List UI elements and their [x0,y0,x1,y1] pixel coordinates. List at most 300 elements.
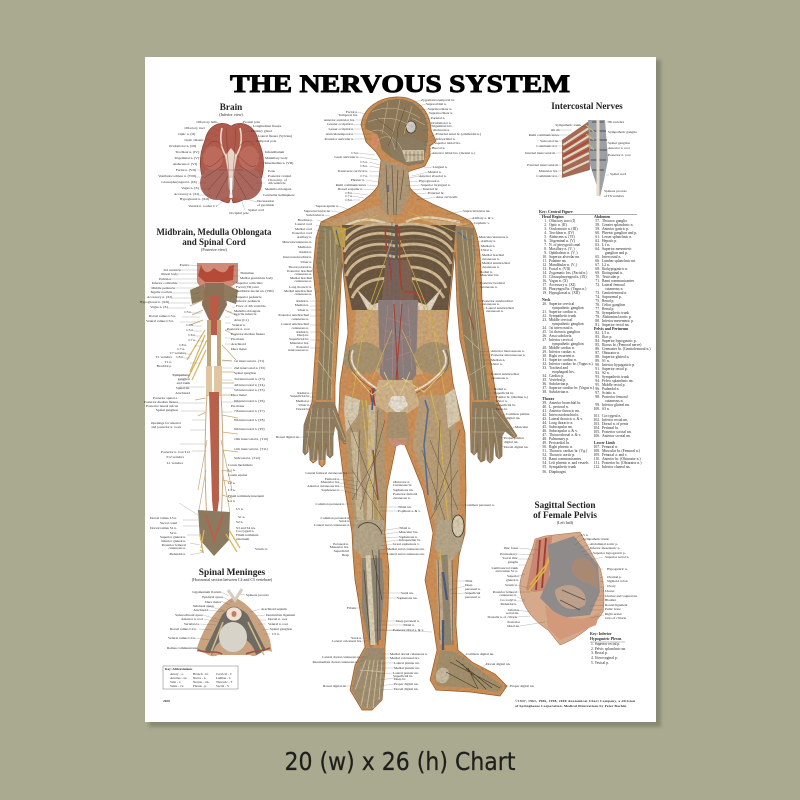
key column: head region, neck, thorax: Oculomotor n. (III) [549,227,578,231]
key column: head region, neck, thorax: 41. [542,409,547,413]
spinal cord labels: Inferior colliculus [152,281,178,285]
spinal cord labels: 9th intercostal n. (T9) [234,427,265,431]
left labels of figure: Suprascapular n. [316,204,339,208]
key column: head region, neck, thorax: 45. [542,425,547,429]
spinal cord labels: Superior peduncle [236,295,262,299]
right labels of figure: Deep [465,583,473,587]
left labels of figure: Posterior antebrachial [278,313,309,317]
key column: abdomen, pelvis, lower limb: 99. [595,403,600,407]
left labels of figure: Lateral antebrachial [281,322,309,326]
right labels of figure: Deep br. [496,407,508,411]
key column: abdomen, pelvis, lower limb: 88. [595,355,600,359]
right labels of figure: Superior labial brs. [434,141,461,145]
key column: abdomen, pelvis, lower limb: 57. [595,219,600,223]
key column: abdomen, pelvis, lower limb: Posterior br. (Obturator n.) [602,461,642,465]
pelvis labels: and ramus S1 n. [495,569,518,573]
right labels of figure: Dorsal digital nn. [504,445,529,449]
key column: head region, neck, thorax: 1st thoracic ganglion [549,330,580,334]
left labels of figure: Sural n. [339,519,350,523]
spinal cord labels: Dorsal ramus L5 n. [150,516,177,520]
spinal cord labels: Spinal ganglion [156,408,178,412]
key column: abdomen, pelvis, lower limb: Iliac p. [602,335,612,339]
key column: abdomen, pelvis, lower limb: 86. [595,347,600,351]
brain labels: Posterior cranial [268,174,291,178]
spinal cord labels: Posterior femoral [162,543,186,547]
brain labels: Optic n. (II) [178,132,196,136]
abdomen [352,310,446,375]
key column: head region, neck, thorax: Palatine nn. [549,259,566,263]
right labels of figure: Muscular brs. [480,273,499,277]
spinal cord labels: 6th intercostal n. (T6) [234,399,265,403]
illustration: spinal meninges [197,589,272,656]
right labels of figure: Saphenous n. [399,535,418,539]
right labels of figure: cutaneous n. [482,257,500,261]
right labels of figure: Medial antebrachial [482,261,510,265]
brain labels: Lateral fissure (Sylvian) [258,134,293,138]
key column: abdomen, pelvis, lower limb: Superior rectal p. [602,367,628,371]
intercostal labels [525,120,637,198]
brain labels: Optic chiasm [184,138,203,142]
neck [378,160,410,215]
right labels of figure: Mental n. [428,170,442,174]
key column: head region, neck, thorax: Anterior bronchial br. [549,401,581,405]
left labels of figure: Peroneal n. [333,542,349,546]
right labels of figure: Common digital nn. [466,652,494,656]
illustration: brain inferior view [200,123,264,203]
spinal cord labels: externum [236,537,249,541]
spinal cord labels: ganglion [178,377,190,381]
key: inferior hypogastric plexus: 4. Uterovaginal p. [591,656,618,660]
pelvis labels: Ovarian p. [607,575,622,579]
right labels of figure: Cutaneous br. [393,483,412,487]
right labels of figure: Proper digital nn. [510,684,535,688]
key column: abdomen, pelvis, lower limb: Inferior mesenteric p. [602,319,634,323]
spinal cord labels: Ventral ramus C3 n. [146,319,174,323]
key column: head region, neck, thorax: Superior cardiac br. (Vagus n.) [549,386,595,390]
key column: head region, neck, thorax [542,215,595,474]
key column: abdomen, pelvis, lower limb: 66. [595,259,600,263]
shoulders skin and clavicle [322,205,395,226]
right labels of figure: Posterior femoral [393,492,417,496]
spinal cord labels: 2nd intercostal n. (T2) [234,366,266,370]
intercostal labels: Spinal cord [610,172,626,176]
key column: abdomen, pelvis, lower limb: Suprarenal p. [602,295,622,299]
key column: head region, neck, thorax: Hypoglossal n. (XII) [549,291,580,295]
right labels of figure: Lateral sural cutaneous nn. [387,552,425,556]
key column: abdomen, pelvis, lower limb: Middle rectal p. [602,383,626,387]
spinal cord labels: Arachnoid [231,342,246,346]
key column: head region, neck, thorax: 8. [544,247,547,251]
key column: abdomen, pelvis, lower limb: 69. [595,271,600,275]
key column: abdomen, pelvis, lower limb: 96. [595,387,600,391]
right labels of figure: Common palmar [506,412,530,416]
pelvis labels [487,533,638,628]
pelvis labels: Posterior [507,620,521,624]
left labels of figure: Medial brachial [290,276,312,280]
key column: abdomen, pelvis, lower limb: S1 n. [602,359,610,363]
right labels of figure: cutaneous n. [393,496,411,500]
key column: abdomen, pelvis, lower limb: Sympathetic trunk [602,375,629,379]
key column: head region, neck, thorax: 33. [542,366,547,370]
key column: head region, neck, thorax: 40. [542,405,547,409]
key column: abdomen, pelvis, lower limb: Cremaster br. (Genitofemoral n.) [602,347,651,351]
key column: abdomen, pelvis, lower limb: 107. [594,445,600,449]
spinal meninges labels: C5 n. [272,632,280,636]
central figure: full body nervous system [276,95,535,715]
key column: head region, neck, thorax: 30. [542,354,547,358]
intercostal labels: Communical n. [536,144,558,148]
left labels of figure: Lateral femoral cutaneous brs. [305,471,348,475]
right labels of figure: Median n. [491,358,505,362]
spinal cord labels: Filum terminale internum [228,494,264,498]
key column: head region, neck, thorax: 49. [542,441,547,445]
subheading: brain: (Inferior view) [219,112,243,117]
right labels of figure: Posterior antebrachial [482,299,513,303]
key column: abdomen, pelvis, lower limb: 75. [595,299,600,303]
spinal cord labels: 10th intercostal n. (T10) [234,437,269,441]
spinal meninges labels: Denticulate ligament [266,613,295,617]
intercostal labels: 4th rib [551,128,560,132]
brain labels: Mamillary body [265,156,288,160]
spinal cord labels: Middle peduncle [151,286,175,290]
key column: head region, neck, thorax: Superior cardiac n. [549,310,577,314]
spinal cord labels: Pia mater [231,337,245,341]
key column: head region, neck, thorax: 32. [542,362,547,366]
spinal cord labels: Dorsal ramus C3 n. [149,314,176,318]
key column: abdomen, pelvis, lower limb: 84. [595,339,600,343]
brain labels: Facial n. (VII) [176,168,197,172]
spinal cord labels: Dura mater [231,393,248,397]
right labels of figure: Supratrochlear n. [428,107,452,111]
spinal cord labels: Cauda equina [228,473,248,477]
right labels of figure: Medial sural cutaneous nn. [387,547,425,551]
key column: head region, neck, thorax: Thoracic aortic p. [549,453,575,457]
pelvis labels: Posterior femoral [493,590,517,594]
key column: abdomen, pelvis, lower limb: Renal p. [602,307,614,311]
right knee and lower leg [434,520,464,560]
left labels of figure: C8 n. [345,191,353,195]
key column: abdomen, pelvis, lower limb: Lesser splanchnic n. [602,235,632,239]
key column: abdomen, pelvis, lower limb: 62. [595,239,600,243]
pelvis labels: labial nn. [507,624,520,628]
key column: abdomen, pelvis, lower limb: 70. [595,275,600,279]
spinal cord labels: 3rd ventricle [163,268,181,272]
left labels of figure: Muscular brs. [321,480,340,484]
key column: head region, neck, thorax: 55. [542,465,547,469]
right labels of figure: Saphenous nn. [397,596,418,600]
pelvis labels: Sacral iliac [502,556,518,560]
left labels of figure: Dorsal br. [296,407,310,411]
key column: abdomen, pelvis, lower limb: Dorsal n. of penis [602,422,629,426]
pelvis labels: L5 n. [581,533,589,537]
key column: head region, neck, thorax: Long thoracic n. [549,421,573,425]
left labels of figure: Ulnar n. [298,308,309,312]
pelvis labels: Superior hypogastric p. [593,551,626,555]
key abbreviations box: Thoracic - T [216,680,232,684]
spinal cord labels: Openings for anterior [151,421,182,425]
left labels of figure: Ulnar n. [301,260,312,264]
heading line 2: of Female Pelvis [533,510,597,520]
key column: head region, neck, thorax: 22. [542,314,547,318]
key column: head region, neck, thorax: 7. [544,243,547,247]
subheading: spinal meninges: (Horizontal section between C4 and C5 vertebrae) [192,577,273,582]
key column: head region, neck, thorax: sympathetic ganglion [552,342,584,346]
left labels of figure: Muscular brs. [290,341,309,345]
key column: abdomen, pelvis, lower limb: Coccygeal n. [602,414,621,418]
key: inferior hypogastric plexus: 3. Rectal p. [591,651,608,655]
key column: head region, neck, thorax: Superior cervical [549,302,574,306]
right labels of figure: Palmar br. (Median n.) [496,395,529,399]
key column: head region, neck, thorax: Inferior cardiac n. [549,350,576,354]
right labels of figure: Lingual n. [433,165,448,169]
spinal cord labels: Spinal nn. [176,386,190,390]
key column: head region, neck, thorax: Thoracodorsal a. & v. [549,433,581,437]
key abbreviations box: Nerves - nn. [193,680,209,684]
spinal cord labels: C7 n. [177,347,185,351]
key column: abdomen, pelvis, lower limb: 63. [595,243,600,247]
key column: head region, neck, thorax: 34. [542,374,547,378]
spinal cord labels: vestibular nuclei nn. (VIII) [236,289,275,293]
intercostal labels: Rami communicantes [529,133,560,137]
key abbreviations box: Sacral - S [216,684,229,688]
spinal cord labels: Conus medullaris [228,463,253,467]
key column: head region, neck, thorax: Subscapular a. & v. [549,429,578,433]
brain labels: Olfactory tract [184,126,205,130]
spinal cord labels: Vagus n. (X) [150,305,169,309]
key column: abdomen, pelvis, lower limb: 61. [595,235,600,239]
key column: abdomen, pelvis, lower limb: Superior gluteal n. [602,355,629,359]
panel: intercostal nerves [525,101,637,198]
panel: midbrain, medulla oblongata and spinal cord [140,227,275,556]
left labels of figure: Muscular brs. [330,545,349,549]
panel: brain [158,102,295,215]
spinal cord labels: Coccygeal n. [236,529,254,533]
panel: sagittal section of female pelvis [487,500,638,708]
key column: abdomen, pelvis, lower limb: Iliacus br. (Femoral nerve) [602,343,642,347]
heading: brain: Brain [220,102,242,112]
right labels of figure: Radial n. [480,270,493,274]
right labels of figure: peroneal n. [465,595,481,599]
key column: head region, neck, thorax: 10. [542,255,547,259]
brain labels: Pons [268,169,275,173]
heading: spinal meninges: Spinal Meninges [199,568,266,578]
left labels of figure: Saphenous n. [321,488,340,492]
key column: head region, neck, thorax: 16. [542,279,547,283]
left labels of figure: Phrenic n. [351,178,365,182]
spinal meninges labels: Anterior n. root [181,617,203,621]
key column: head region, neck, thorax: Tracheal and [549,366,568,370]
key abbreviations box: Lumbar - L [216,676,231,680]
pelvis labels: Uterine and vaginal nn. [605,594,638,598]
spinal meninges labels: Dorsal ramus C4 n. [170,627,197,631]
spinal cord labels: Sciatic n. [255,547,268,551]
key column: head region, neck, thorax: 56. [542,470,547,474]
key column: abdomen, pelvis, lower limb: 112. [594,465,600,469]
spinal cord labels: Floor of 4th ventricle [236,304,266,308]
right labels of figure: Medial dorsal cutaneous n. [390,652,428,656]
intercostal labels: External intercostal m. [527,163,559,167]
spinal cord labels: L4 n. [228,499,236,503]
pelvis labels: Lumbosacral trunk [491,566,518,570]
right labels of figure: Lateral antebrachial [491,372,519,376]
key column: abdomen, pelvis, lower limb: 85. [595,343,600,347]
key column: head region, neck, thorax: 36. [542,382,547,386]
left labels of figure: Great auricular n. [334,155,359,159]
left labels of figure: C3 n. [351,151,359,155]
key column: head region, neck, thorax: 25. [542,330,547,334]
key column: abdomen, pelvis, lower limb: 110. [594,457,600,461]
pelvis labels: ganglia [508,560,518,564]
head dissection [365,99,428,165]
left labels of figure: Median n. [295,303,309,307]
right labels of figure: Musculocutaneous n. [479,235,509,239]
key column: head region, neck, thorax: 42. [542,413,547,417]
spinal cord labels: Posterior spinal a. [153,396,178,400]
left labels of figure: Intercostobrachial n. [283,255,312,259]
right labels of figure: Medial plantar nn. [394,666,420,670]
left labels of figure: Fibula [347,606,356,610]
spinal cord labels: Dorsal ramus S1 n. [150,526,177,530]
key column: abdomen, pelvis, lower limb: Inferior cluneal nn. [602,465,630,469]
brain labels: Trochlear n. (IV) [175,150,200,154]
skin silhouette [303,97,517,710]
intercostal labels: T6 vertebra [608,120,625,124]
key column: head region, neck, thorax: Middle cardiac n. [549,346,575,350]
pelvis labels: Promontory [500,552,517,556]
key column: abdomen, pelvis, lower limb: 71. [595,279,600,283]
key column: abdomen, pelvis, lower limb: Sympathetic trunk [602,311,629,315]
key column: head region, neck, thorax: Glossopharyngeal n. (IX) [549,275,587,279]
spinal cord labels: Superior colliculus [236,281,263,285]
spinal cord labels: 4th intercostal n. (T4) [234,383,265,387]
pelvis labels: rectal nn. [506,611,519,615]
key abbreviations box: Plexus - p. [193,684,207,688]
left labels of figure: Deep br. [297,333,309,337]
pelvis labels: gluteal n. [506,578,519,582]
key column: head region, neck, thorax: Thoracic cardiac br. (Vg.) [549,449,588,453]
right labels of figure: Anterior alveolar n. [419,174,447,178]
key column: head region, neck, thorax: Right recurrent n. [549,354,575,358]
key column: abdomen, pelvis, lower limb: 106. [594,434,600,438]
left labels of figure: cutaneous n. [294,292,312,296]
intercostal labels: of T8 vertebra [604,194,624,198]
spinal meninges labels: Epidural space [202,595,223,599]
right labels of figure: Superior laryngeal n. [421,183,451,187]
spinal meninges labels: Ventral n. root [268,622,288,626]
right labels of figure: Dorsal digital nn. [486,662,511,666]
key column: abdomen, pelvis, lower limb: L5 n. [602,331,610,335]
key column: abdomen, pelvis, lower limb: 95. [595,383,600,387]
key column: head region, neck, thorax: 35. [542,378,547,382]
pelvis labels: Uterus [605,589,615,593]
right labels of figure: Proper palmar [504,436,525,440]
spinal cord labels: T1 n. [165,360,172,364]
brain labels: Vestibulocochlear n. (VIII) [158,174,197,178]
key column: abdomen, pelvis, lower limb: 90. [595,363,600,367]
key column: head region, neck, thorax: Pharyngeal br. (Vagus n.) [549,287,587,291]
key column: abdomen, pelvis, lower limb: 102. [594,418,600,422]
left labels of figure: Lesser occipital n. [328,127,354,131]
right labels of figure: Anterior interosseous n. [491,349,525,353]
key column: head region, neck, thorax: Optic n. (II) [549,223,567,227]
spinal cord labels: C3 n. [184,310,192,314]
right labels of figure: cutaneous n. [480,285,498,289]
brain labels: Hypoglossal n. (XII) [180,197,210,201]
left labels of figure: Posterior brachial [287,269,312,273]
key column: abdomen, pelvis, lower limb: Obturator n. [602,351,620,355]
spinal cord labels: Arachnoid [175,391,190,395]
spinal cord labels: Brachial p. [157,364,172,368]
spinal cord labels: C8 n. [176,355,184,359]
key column: abdomen, pelvis, lower limb: 92. [595,371,600,375]
key column: head region, neck, thorax: Vertebral p. [549,378,566,382]
spinal meninges labels: Subarachnoid space [175,613,203,617]
spinal cord labels: Pia mater [231,404,245,408]
key column: head region, neck, thorax: 11. [543,259,547,263]
left labels of figure: Median n. [296,399,310,403]
key column: abdomen, pelvis, lower limb: 81. [595,323,600,327]
spinal meninges labels: Dorsal n. root [268,617,287,621]
key column: head region, neck, thorax: 26. [542,334,547,338]
spinal meninges labels: Arachnoid septum [261,607,287,611]
key: inferior hypogastric plexus: 1. Superior rectal p. [591,642,620,646]
left labels of figure: C6 n. [345,198,353,202]
right labels of figure: Axillary n. [481,239,496,243]
right labels of figure: digital nn. [504,440,518,444]
key column: head region, neck, thorax: 24. [542,326,547,330]
right labels of figure: Superficial [465,591,480,595]
right arm [456,226,490,400]
key column: abdomen, pelvis, lower limb: Lumbar splanchnic nn. [602,259,636,263]
right labels of figure: Deep br. [394,677,406,681]
key column: head region, neck, thorax: 37. [542,386,547,390]
key column: abdomen, pelvis, lower limb: Rami communicantes [602,279,635,283]
key column: abdomen, pelvis, lower limb: Lower Limb [594,441,615,445]
right labels of figure: Dorsal digital nn. [394,687,419,691]
key column: head region, neck, thorax: 6. [544,239,547,243]
left labels of figure: Lateral calcaneal brs. [332,639,362,643]
key column: head region, neck, thorax: Mandibular n. (V₃) [549,263,578,267]
brain labels: Abducens n. (VI) [173,162,198,166]
spinal cord labels: 7th intercostal n. (T7) [234,409,265,413]
key column: head region, neck, thorax: 23. [542,318,547,322]
brain labels: Spinal cord [248,208,264,212]
key column: head region, neck, thorax: 21. [542,310,547,314]
spinal cord labels: Dura mater [231,347,248,351]
copyright [515,698,635,708]
key column: abdomen, pelvis, lower limb: Abdominal aortic p. [602,315,632,319]
pelvis labels: Bladder [605,598,617,602]
key column: head region, neck, thorax: Middle cervical [549,318,572,322]
pelvis labels: Dorsalis n. of clitoris [487,615,518,619]
key column: head region, neck, thorax: 53. [542,457,547,461]
left labels of figure: Superficial br. [289,337,309,341]
spinal cord labels: and trunk [177,381,190,385]
spinal cord labels: S1 n. [238,515,245,519]
key column: head region, neck, thorax: Pulmonary p. [549,437,569,441]
pelvis labels: Right ureter [605,612,623,616]
key column: abdomen, pelvis, lower limb: 87. [595,351,600,355]
key column: head region, neck, thorax: Head Region [542,215,564,219]
spinal meninges labels: Subdural space [193,604,214,608]
left labels of figure: Lateral sural cutaneous n. [314,523,350,527]
key abbreviations box: Veins - vv. [170,684,184,688]
key column: abdomen, pelvis, lower limb: L1 n. [602,243,610,247]
key column: abdomen, pelvis, lower limb: Testicular p. [602,275,620,279]
key abbreviations box: Vein - v. [170,680,181,684]
left labels of figure: Radial n. [299,250,312,254]
brain labels [158,120,295,215]
